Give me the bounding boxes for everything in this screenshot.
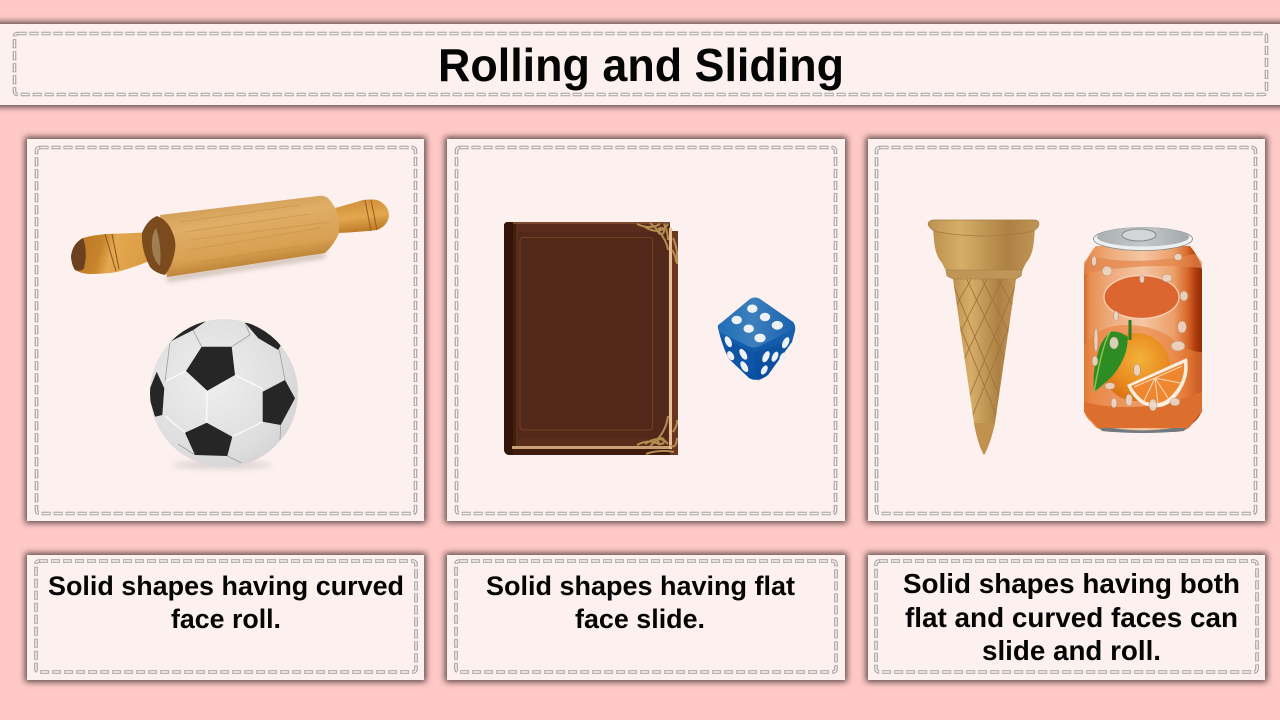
panel: curved shapes xyxy=(27,139,424,521)
icon: orange soda can xyxy=(1084,228,1202,433)
orange fruit xyxy=(1102,333,1170,401)
book corner ornaments xyxy=(637,223,677,454)
caption text: Solid shapes having curved xyxy=(48,571,404,601)
can orange leaf xyxy=(1094,332,1128,392)
caption text: face roll. xyxy=(171,604,281,634)
caption text: face slide. xyxy=(575,604,705,634)
icon: soccer ball xyxy=(148,318,300,470)
title: Rolling and Sliding xyxy=(438,39,844,91)
panel: title banner xyxy=(0,24,1280,105)
caption text: flat and curved faces can xyxy=(905,602,1238,633)
caption text: slide and roll. xyxy=(982,635,1161,666)
can label oval xyxy=(1104,276,1179,318)
panel: caption flat xyxy=(447,555,845,680)
panel: flat shapes xyxy=(447,139,845,521)
icon: rolling pin xyxy=(71,196,389,279)
panel: flat and curved shapes xyxy=(868,139,1265,521)
panel: caption both xyxy=(868,555,1265,680)
caption text: Solid shapes having both xyxy=(903,568,1240,599)
icon: ice cream cone xyxy=(928,220,1039,460)
panel: caption curved xyxy=(27,555,424,680)
icon: book xyxy=(504,222,678,455)
icon: dice xyxy=(718,298,795,381)
caption text: Solid shapes having flat xyxy=(486,571,795,601)
can droplets xyxy=(1092,254,1188,411)
